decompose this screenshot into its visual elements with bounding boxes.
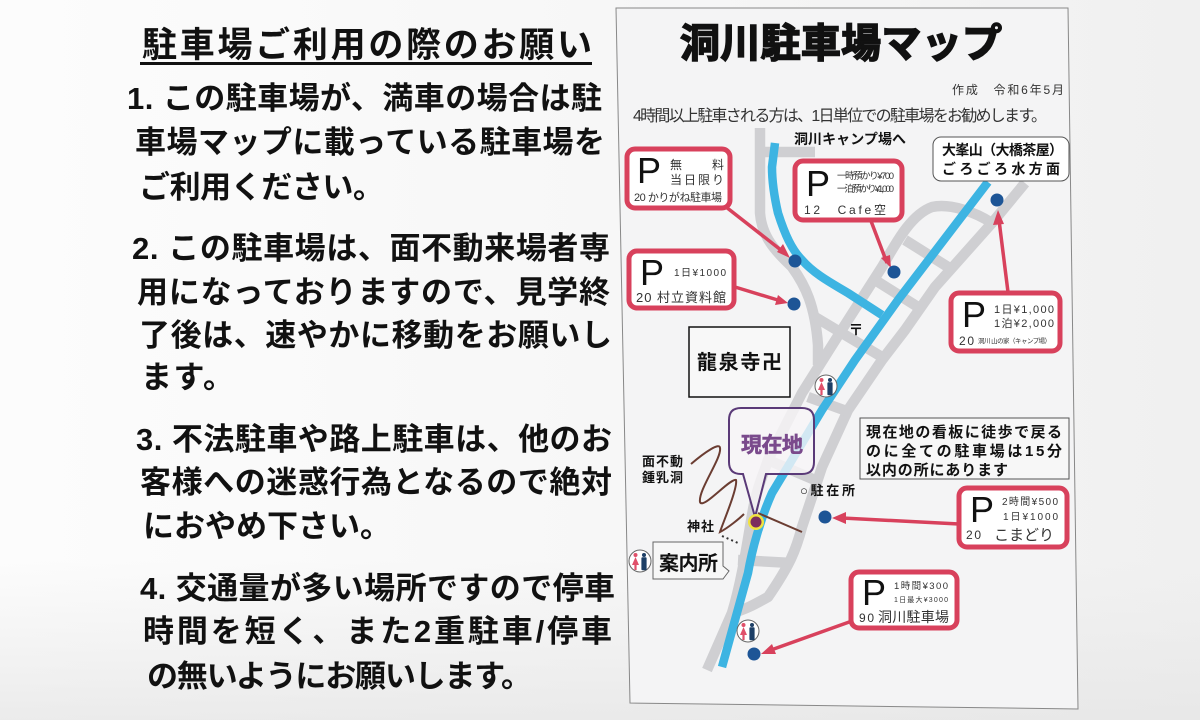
request 2 xyxy=(132,231,612,395)
label: cave xyxy=(642,454,683,485)
parking: Yama no Ie: 洞川 山の家（キャンプ場） xyxy=(978,336,1051,345)
request 3: 3. 不法駐車や路上駐車は、他のお xyxy=(136,422,612,457)
parking: Karigane xyxy=(627,149,802,268)
label: Omine direction: ごろごろ水方面 xyxy=(942,161,1060,177)
label: cave: 鍾乳洞 xyxy=(642,470,683,485)
parking: Dorogawa: 90 xyxy=(859,611,874,625)
parking: Dorogawa xyxy=(748,572,957,660)
parking: Karigane: 20 かりがね駐車場 xyxy=(634,190,722,204)
parking: Komadori: 20 xyxy=(966,528,981,542)
icon: restroom at information office xyxy=(629,550,651,572)
request 3 xyxy=(136,422,612,544)
note: walking time: 現在地の看板に徒歩で戻る xyxy=(866,423,1062,441)
current location callout: 現在地 xyxy=(741,434,803,457)
shrine trail xyxy=(722,536,738,543)
label: police box: ○駐在所 xyxy=(800,483,855,498)
parking: Yama no Ie: 1日¥1,000 xyxy=(994,304,1054,316)
parking: Village museum: P xyxy=(640,252,664,293)
current location marker xyxy=(748,514,764,530)
post office mark: 〒 xyxy=(848,322,864,339)
request 1: 1. この駐車場が、満車の場合は駐 xyxy=(127,81,602,116)
information office xyxy=(653,542,729,579)
parking: Karigane: P xyxy=(637,150,661,191)
heading: requests: 駐車場ご利用の際のお願い xyxy=(142,26,592,65)
parking: Yama no Ie xyxy=(951,194,1060,351)
parking: Karigane: 無 料 xyxy=(670,157,724,172)
parking: Yama no Ie: P xyxy=(962,294,986,335)
icon: restroom south xyxy=(737,620,759,642)
panel: parking map xyxy=(616,8,1078,709)
parking: Komadori: こまどり xyxy=(994,527,1054,544)
map sheet border xyxy=(616,8,1078,709)
parking: Dorogawa: P xyxy=(862,572,886,613)
note: walking time: 以内の所にあります xyxy=(866,462,1008,479)
note: walking time xyxy=(860,418,1069,479)
panel: parking requests xyxy=(127,26,615,694)
parking: Cafe Sora xyxy=(795,161,902,278)
current location callout xyxy=(729,408,814,517)
request 4: の無いようにお願いします。 xyxy=(147,659,532,694)
label: Omine direction xyxy=(933,137,1069,181)
parking: Village museum: 20 村立資料館 xyxy=(636,290,726,305)
notice: 4時間以上駐車される方は、1日単位での駐車場をお勧めします。 xyxy=(633,107,1047,125)
parking: Cafe Sora: 12 Cafe空 xyxy=(804,203,886,217)
parking: Cafe Sora: 一時預かり¥700 xyxy=(837,171,894,182)
request 4 xyxy=(140,571,615,694)
request 1: ご利用ください。 xyxy=(139,170,384,205)
map title: 洞川駐車場マップ xyxy=(680,22,1002,66)
parking: Dorogawa: 1日最大¥3000 xyxy=(894,595,948,604)
request 4: 4. 交通量が多い場所ですので停車 xyxy=(140,571,615,606)
parking: Komadori: 1日¥1000 xyxy=(1003,512,1058,523)
note: walking time: のに全ての駐車場は15分 xyxy=(866,442,1062,460)
request 1: 車場マップに載っている駐車場を xyxy=(135,125,605,160)
request 2: 2. この駐車場は、面不動来場者専 xyxy=(132,231,610,266)
parking: Village museum xyxy=(629,251,800,310)
information office: 案内所 xyxy=(659,552,718,575)
request 4: 時間を短く、また2重駐車/停車 xyxy=(143,614,612,649)
creation date: 作成 令和6年5月 xyxy=(952,83,1064,97)
label: camp direction: 洞川キャンプ場へ xyxy=(794,131,906,147)
parking: Karigane: 当日限り xyxy=(670,173,724,187)
request 3: におやめ下さい。 xyxy=(143,509,391,544)
label: Omine direction: 大峯山（大橋茶屋） xyxy=(942,142,1063,158)
label: cave: 面不動 xyxy=(642,454,683,469)
request 1 xyxy=(127,81,605,205)
temple box: 龍泉寺卍 xyxy=(697,351,782,374)
parking: Komadori xyxy=(818,488,1067,547)
roads xyxy=(707,128,1025,670)
request 2: ます。 xyxy=(141,360,234,395)
parking: Dorogawa: 1時間¥300 xyxy=(894,581,948,592)
label: shrine: 神社 xyxy=(687,519,714,534)
request 3: 客様への迷惑行為となるので絶対 xyxy=(140,465,612,500)
parking: Komadori: 2時間¥500 xyxy=(1002,496,1058,508)
parking: Yama no Ie: 20 xyxy=(959,334,974,348)
rivers xyxy=(722,143,988,667)
request 2: 了後は、速やかに移動をお願いし xyxy=(139,318,612,353)
parking: Cafe Sora: P xyxy=(806,163,830,204)
branch path xyxy=(758,513,802,532)
parking: Village museum: 1日¥1000 xyxy=(674,268,726,279)
temple box xyxy=(689,327,790,397)
cave path xyxy=(691,446,744,532)
parking: Dorogawa: 洞川駐車場 xyxy=(878,609,949,625)
parking: Komadori: P xyxy=(970,489,994,530)
parking: Yama no Ie: 1泊¥2,000 xyxy=(994,317,1054,330)
request 2: 用になっておりますので、見学終 xyxy=(137,275,610,310)
icon: restroom north xyxy=(815,375,837,397)
parking: Cafe Sora: 一泊預かり¥1,000 xyxy=(837,184,894,195)
